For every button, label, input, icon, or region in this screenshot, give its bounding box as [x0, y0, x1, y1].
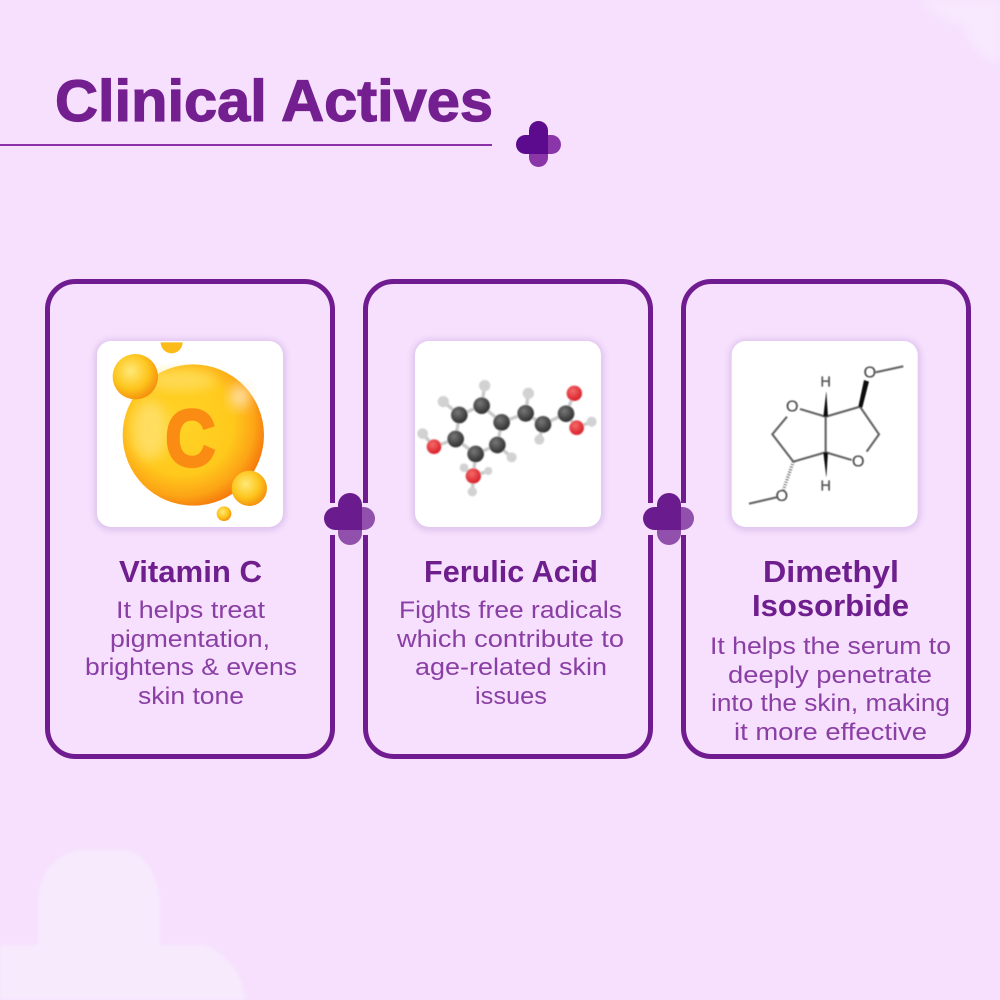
- icon: dimethyl isosorbide structure: H: [820, 478, 831, 494]
- description: pigmentation,: [110, 626, 270, 653]
- description: [396, 597, 624, 710]
- heading: Vitamin C: [119, 554, 262, 589]
- description: It helps treat: [116, 597, 265, 624]
- panel border: [684, 282, 968, 756]
- description: brightens & evens: [85, 654, 297, 681]
- icon: dimethyl isosorbide structure: O: [786, 398, 798, 415]
- description: It helps the serum to: [710, 633, 951, 660]
- decorative cloud: bottom left: [0, 850, 245, 1000]
- panel border: [48, 282, 332, 756]
- description: which contribute to: [396, 626, 624, 653]
- description: skin tone: [138, 683, 244, 710]
- panel border: [366, 282, 650, 756]
- description: [85, 597, 297, 710]
- tile shadow: [729, 339, 921, 531]
- heading: Ferulic Acid: [424, 554, 598, 589]
- description: Fights free radicals: [399, 597, 622, 624]
- heading: [752, 554, 909, 623]
- icon: vitamin C sphere: [97, 341, 283, 527]
- icon: vitamin C sphere: C: [165, 393, 215, 482]
- icon: plus by title: [516, 121, 561, 167]
- icon: dimethyl isosorbide structure: O: [776, 488, 788, 505]
- description: into the skin, making: [711, 690, 950, 717]
- panel: Ferulic Acid: [366, 282, 650, 756]
- icon: dimethyl isosorbide structure: O: [852, 454, 864, 471]
- heading: Isosorbide: [752, 588, 909, 623]
- description: it more effective: [734, 719, 927, 746]
- description: issues: [475, 683, 547, 710]
- icon: plus connector 2: [643, 493, 694, 545]
- icon: dimethyl isosorbide structure: O: [864, 365, 876, 382]
- panel: Dimethyl Isosorbide: [684, 282, 968, 756]
- description: age-related skin: [415, 654, 607, 681]
- tile shadow: [412, 339, 604, 531]
- panel: Vitamin C: [48, 282, 332, 756]
- tile shadow: [94, 339, 286, 531]
- icon: plus connector 1: [324, 493, 375, 545]
- title: Clinical Actives: [55, 69, 493, 134]
- description: [710, 633, 951, 746]
- title underline: [0, 144, 492, 146]
- decorative cloud: top right: [920, 0, 1000, 62]
- icon: ferulic acid molecule: [415, 341, 601, 527]
- icon: dimethyl isosorbide structure: H: [820, 375, 831, 391]
- heading: Dimethyl: [763, 554, 899, 589]
- description: deeply penetrate: [728, 662, 932, 689]
- icon: dimethyl isosorbide structure: [732, 341, 918, 527]
